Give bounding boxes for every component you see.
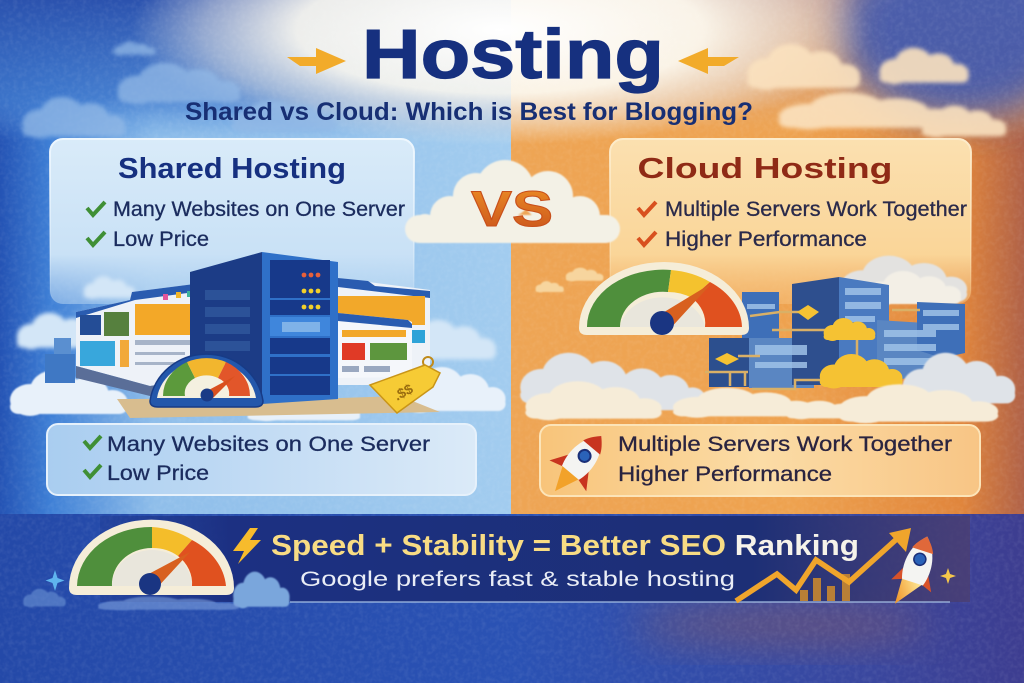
clouds: upper right <box>840 256 967 306</box>
feature: higher performance: Higher Performance <box>665 228 867 251</box>
gauge: seo <box>69 520 234 595</box>
top clouds left <box>22 42 336 138</box>
clouds: shared base <box>10 367 506 421</box>
clouds: shared backdrop <box>17 276 496 361</box>
panel: cloud hosting <box>610 139 971 304</box>
gold clouds <box>715 305 902 388</box>
seo headline: Speed + Stability = Better SEO Ranking <box>271 530 859 562</box>
icon: right title arrow <box>678 48 739 74</box>
icon: rocket <box>537 421 620 507</box>
floor <box>117 396 440 418</box>
right browser windows <box>338 278 430 385</box>
panel: cloud bottom <box>537 421 980 507</box>
feature: higher performance: Higher Performance <box>618 463 832 486</box>
gauge: cloud <box>579 262 749 335</box>
subtitle: Shared vs Cloud: Which is Best for Blogging? <box>185 98 753 126</box>
bottom banner <box>23 516 970 613</box>
panel: shared bottom <box>47 424 476 495</box>
heading: shared hosting: Shared Hosting <box>118 153 346 185</box>
cloud illustration <box>520 256 1015 423</box>
server tower <box>190 252 338 404</box>
heading: cloud hosting: Cloud Hosting <box>638 153 892 185</box>
feature: multiple servers: Multiple Servers Work Together <box>618 433 952 456</box>
top clouds right <box>747 44 1006 138</box>
banner clouds <box>23 572 290 610</box>
feature: many websites: Many Websites on One Server <box>107 433 430 456</box>
panel: shared hosting <box>50 139 414 304</box>
icon: sparkle <box>46 570 64 591</box>
left browser window <box>76 282 210 396</box>
icon: sparkle gold <box>940 568 956 584</box>
shared illustration <box>10 252 506 421</box>
icon: small building <box>45 338 75 383</box>
chart: growth arrow <box>736 528 911 601</box>
icon: seo rocket <box>884 530 947 613</box>
gauge: shared <box>150 354 263 407</box>
seo subline: Google prefers fast & stable hosting <box>300 568 735 591</box>
vs cloud: VS <box>471 181 553 237</box>
feature: multiple servers: Multiple Servers Work Together <box>665 198 967 221</box>
small decorative clouds <box>536 268 603 292</box>
feature: low price: Low Price <box>107 462 209 485</box>
icon: price tag: .$$ <box>391 380 416 404</box>
icon: left title arrow <box>287 48 346 74</box>
icon: price tag <box>370 357 440 413</box>
feature: low price: Low Price <box>113 228 209 251</box>
network connectors <box>705 310 920 389</box>
title: Hosting <box>362 15 664 93</box>
vs cloud <box>405 160 620 243</box>
icon: lightning <box>233 528 261 564</box>
feature: many websites: Many Websites on One Server <box>113 198 405 221</box>
clouds: cloud base <box>520 353 1015 423</box>
server racks <box>709 277 965 388</box>
